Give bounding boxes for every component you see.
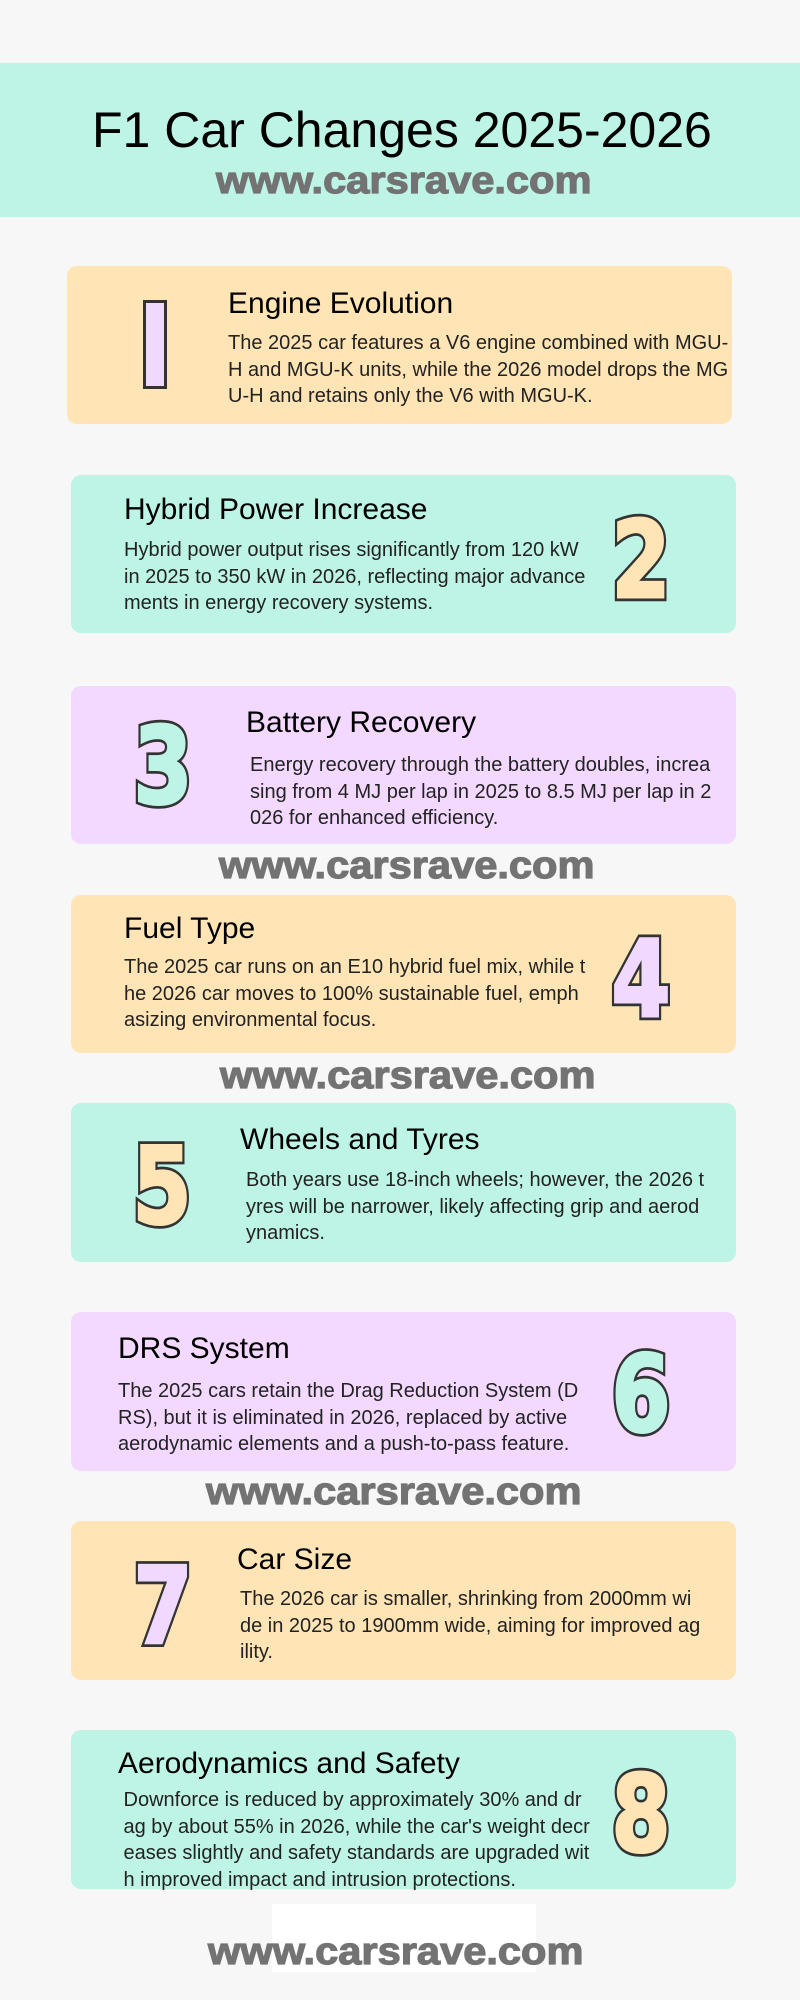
text: Fuel Type: he 2026 car moves to 100% sustainable fuel, emph	[124, 982, 579, 1004]
heading: Car Size: Car Size	[237, 1543, 352, 1576]
text: Car Size	[240, 1588, 700, 1663]
title: F1 Car Changes 2025-2026	[92, 102, 712, 158]
white footer block	[272, 1904, 536, 1972]
number 5: 5	[133, 1125, 191, 1248]
text: Battery Recovery	[250, 754, 711, 829]
heading: Battery Recovery: Battery Recovery	[246, 706, 476, 739]
number 6: 6	[612, 1333, 670, 1456]
text: Wheels and Tyres: yres will be narrower, likely affecting grip and aerod	[246, 1196, 699, 1218]
website watermark: after panel 3: www.carsrave.com	[218, 845, 594, 887]
heading: Hybrid Power Increase: Hybrid Power Increase	[124, 493, 427, 526]
text: Fuel Type	[124, 956, 586, 1031]
panel 1: Engine Evolution	[67, 266, 732, 424]
number 2: 2	[611, 499, 670, 622]
text: Aerodynamics and Safety: ag by about 55% in 2026, while the car's weight decr	[124, 1816, 590, 1838]
number 6: 6	[612, 1333, 670, 1456]
panel 2: Hybrid Power Increase	[71, 475, 736, 633]
text: Aerodynamics and Safety	[124, 1789, 590, 1890]
text: Hybrid Power Increase: Hybrid power output rises significantly from 120 kW	[124, 539, 579, 561]
text: Car Size: The 2026 car is smaller, shrinking from 2000mm wi	[240, 1588, 691, 1610]
text: Hybrid Power Increase	[124, 539, 585, 614]
text: Wheels and Tyres	[246, 1169, 704, 1244]
number 1: 1	[112, 276, 194, 414]
heading: Engine Evolution: Engine Evolution	[228, 287, 453, 320]
text: DRS System: aerodynamic elements and a push-to-pass feature.	[118, 1433, 569, 1455]
text: Engine Evolution: The 2025 car features a V6 engine combined with MGU-	[228, 332, 728, 354]
heading: Fuel Type: Fuel Type	[124, 912, 255, 945]
number 3: 3	[133, 705, 192, 828]
number 1	[143, 300, 167, 389]
text: Battery Recovery: sing from 4 MJ per lap in 2025 to 8.5 MJ per lap in 2	[250, 780, 711, 802]
panel 4: Fuel Type	[71, 895, 736, 1053]
text: DRS System: The 2025 cars retain the Drag Reduction System (D	[118, 1380, 578, 1402]
website watermark: header: www.carsrave.com	[216, 160, 591, 202]
website watermark: footer: www.carsrave.com	[208, 1931, 583, 1973]
text: Engine Evolution: U-H and retains only the V6 with MGU-K.	[228, 385, 593, 407]
number 4: 4	[612, 918, 670, 1041]
text: Aerodynamics and Safety: Downforce is reduced by approximately 30% and dr	[124, 1789, 582, 1811]
website watermark: after panel 4: www.carsrave.com	[220, 1055, 595, 1097]
panel 8: Aerodynamics and Safety	[71, 1730, 736, 1889]
number 8: 8	[612, 1753, 670, 1876]
text: Wheels and Tyres: ynamics.	[246, 1222, 325, 1244]
text: Battery Recovery: Energy recovery through the battery doubles, increa	[250, 754, 710, 776]
text: Fuel Type: The 2025 car runs on an E10 hybrid fuel mix, while t	[124, 956, 585, 978]
text: DRS System: RS), but it is eliminated in 2026, replaced by active	[118, 1406, 567, 1428]
panel 3: Battery Recovery	[71, 686, 736, 844]
text: Wheels and Tyres: Both years use 18-inch wheels; however, the 2026 t	[246, 1169, 704, 1191]
text: DRS System	[118, 1380, 578, 1455]
text: Battery Recovery: 026 for enhanced efficiency.	[250, 807, 498, 829]
number 8: 8	[612, 1753, 670, 1876]
heading: Wheels and Tyres: Wheels and Tyres	[240, 1123, 480, 1156]
panel 5: Wheels and Tyres	[71, 1103, 736, 1262]
text: Hybrid Power Increase: ments in energy recovery systems.	[124, 592, 433, 614]
number 4: 4	[612, 918, 670, 1041]
heading: Aerodynamics and Safety: Aerodynamics and Safety	[118, 1747, 460, 1780]
header band	[0, 63, 800, 217]
text: Car Size: de in 2025 to 1900mm wide, aiming for improved ag	[240, 1614, 700, 1636]
text: Hybrid Power Increase: in 2025 to 350 kW in 2026, reflecting major advance	[124, 566, 585, 588]
text: Aerodynamics and Safety: eases slightly and safety standards are upgraded wit	[124, 1842, 589, 1864]
number 1: 1	[112, 276, 194, 414]
number 7: 7	[134, 1545, 192, 1668]
website watermark: after panel 6: www.carsrave.com	[206, 1471, 581, 1513]
number 7: 7	[134, 1545, 192, 1668]
text: Car Size: ility.	[240, 1641, 273, 1663]
number 5: 5	[133, 1125, 191, 1248]
panel 7: Car Size	[71, 1521, 736, 1680]
text: Engine Evolution: H and MGU-K units, while the 2026 model drops the MG	[228, 358, 728, 380]
number 3: 3	[133, 705, 192, 828]
text: Fuel Type: asizing environmental focus.	[124, 1009, 376, 1031]
text: Aerodynamics and Safety: h improved impact and intrusion protections.	[124, 1868, 516, 1890]
number 2: 2	[611, 499, 670, 622]
heading: DRS System: DRS System	[118, 1332, 290, 1365]
text: Engine Evolution	[228, 332, 728, 407]
panel 6: DRS System	[71, 1312, 736, 1471]
